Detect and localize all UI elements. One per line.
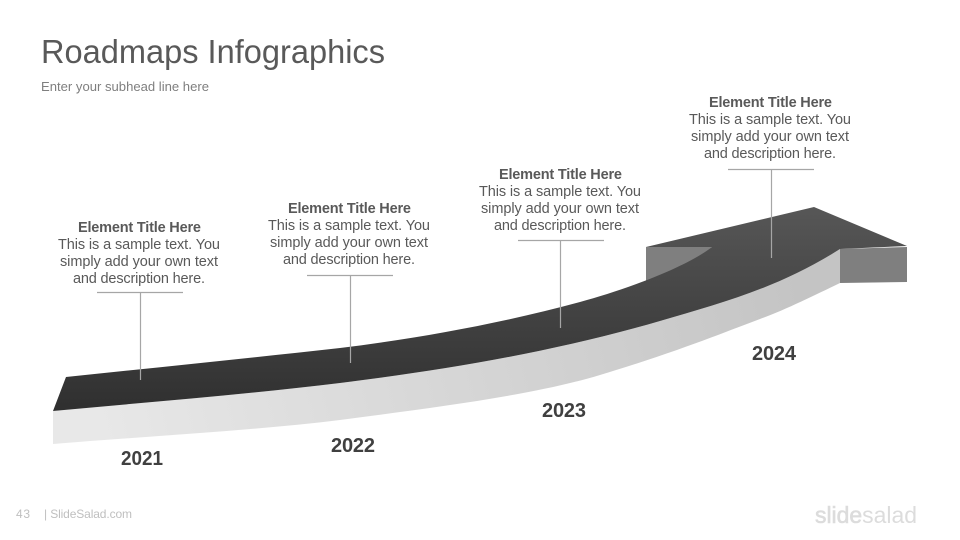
callout: 2023 bbox=[479, 167, 641, 328]
subhead: Enter your subhead line here bbox=[41, 79, 209, 94]
callout: 2024: This is a sample text. You bbox=[689, 112, 851, 128]
callout: 2024: simply add your own text bbox=[691, 129, 849, 145]
callout: 2023: and description here. bbox=[494, 218, 626, 234]
callout: 2024: and description here. bbox=[704, 146, 836, 162]
roadmap arrow bbox=[53, 207, 907, 444]
callout: 2022: This is a sample text. You bbox=[268, 218, 430, 234]
footer site name: | SlideSalad.com bbox=[44, 507, 132, 521]
year: 2023: 2023 bbox=[542, 400, 586, 422]
callout: 2022: and description here. bbox=[283, 252, 415, 268]
callout: 2023: Element Title Here bbox=[499, 167, 622, 183]
callout: 2024: Element Title Here bbox=[709, 95, 832, 111]
callout: 2021: Element Title Here bbox=[78, 220, 201, 236]
callout: 2022: Element Title Here bbox=[288, 201, 411, 217]
title: Roadmaps Infographics bbox=[41, 33, 385, 70]
callout: 2023: This is a sample text. You bbox=[479, 184, 641, 200]
page number: 43 bbox=[16, 507, 30, 521]
arrow top surface bbox=[53, 207, 907, 411]
year: 2021: 2021 bbox=[121, 448, 163, 470]
arrow right wing back face bbox=[840, 247, 907, 283]
callout: 2021: and description here. bbox=[73, 271, 205, 287]
callout: 2022 bbox=[268, 201, 430, 363]
arrow left wing back face bbox=[646, 247, 712, 281]
callout: 2021: simply add your own text bbox=[60, 254, 218, 270]
year: 2022: 2022 bbox=[331, 435, 375, 457]
callout: 2022: simply add your own text bbox=[270, 235, 428, 251]
callout: 2024 bbox=[689, 95, 851, 258]
year: 2024: 2024 bbox=[752, 343, 797, 365]
logo: slidesalad bbox=[815, 502, 917, 528]
callout: 2021: This is a sample text. You bbox=[58, 237, 220, 253]
callout: 2023: simply add your own text bbox=[481, 201, 639, 217]
arrow side face bbox=[53, 249, 840, 444]
callout: 2021 bbox=[58, 220, 220, 380]
